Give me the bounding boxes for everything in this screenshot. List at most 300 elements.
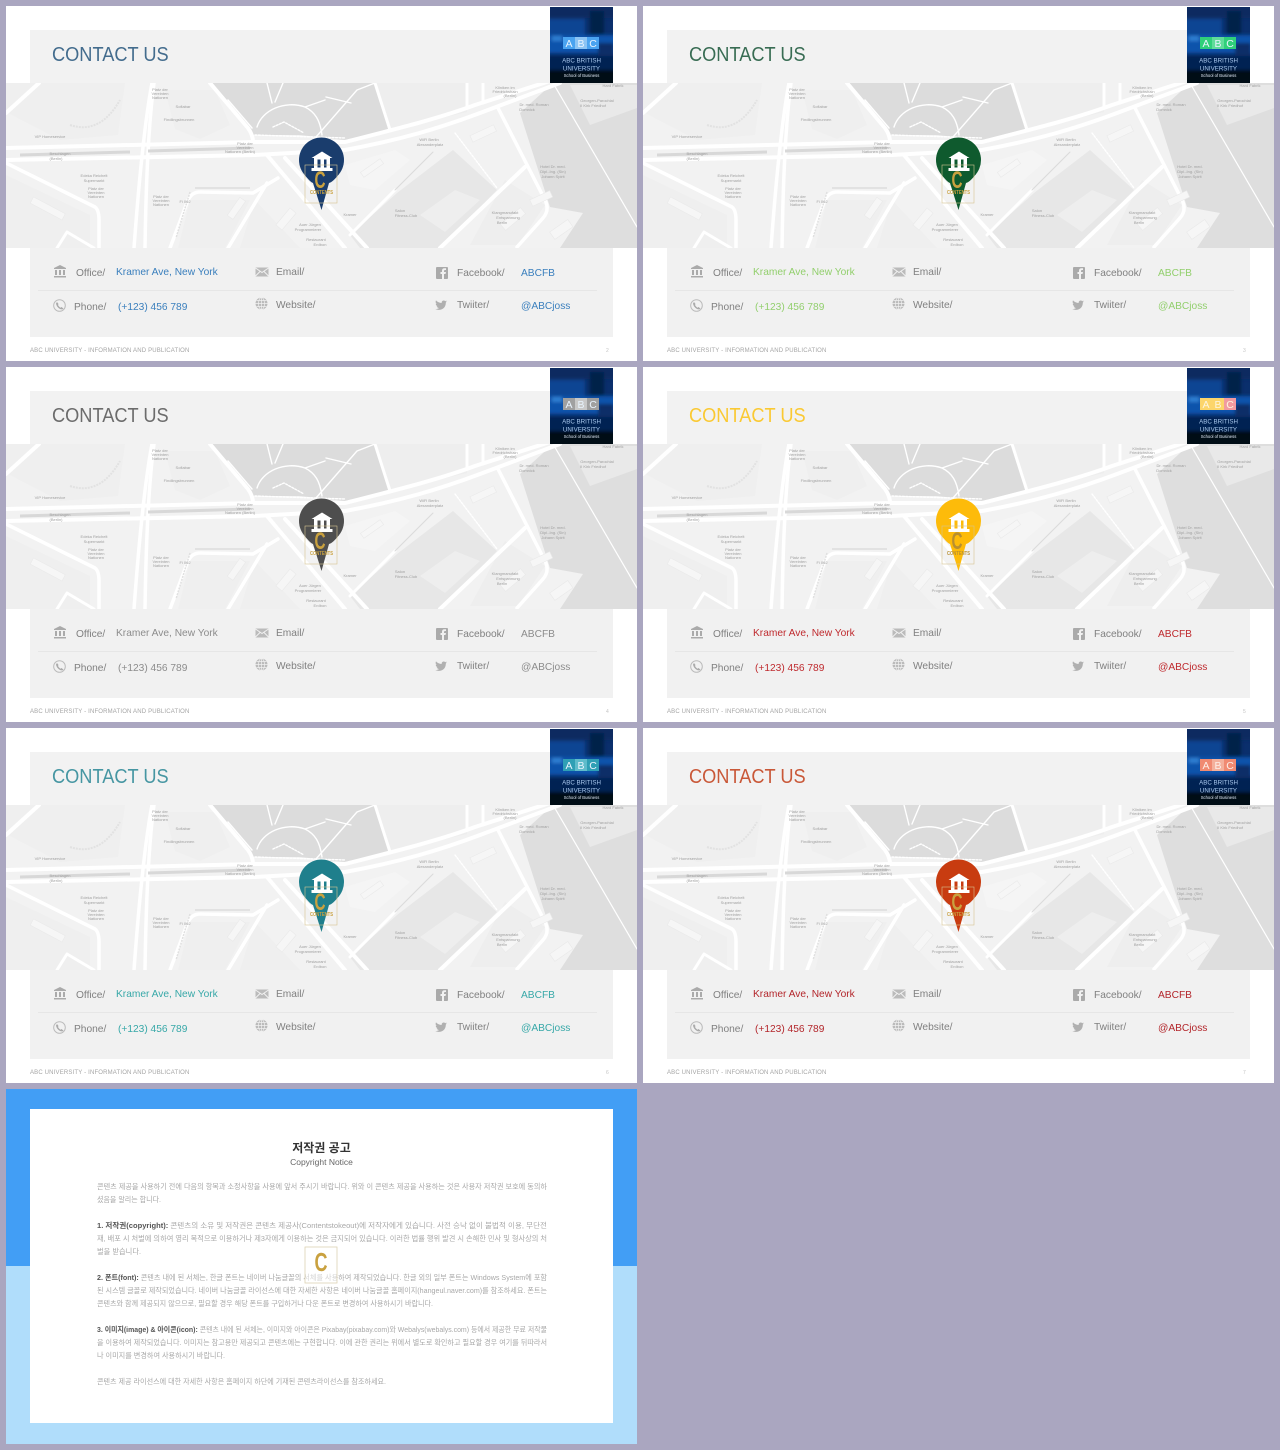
- map: Berlin: [497, 220, 507, 225]
- logo: C: [589, 399, 597, 411]
- icon: twitter: [1072, 1022, 1084, 1032]
- map: Nationen: [789, 95, 805, 100]
- map: (Berlin): [50, 156, 63, 161]
- email label: Email/: [276, 267, 304, 278]
- title: CONTACT US: [52, 405, 168, 427]
- facebook value: ABCFB: [1158, 629, 1192, 640]
- logo: A: [565, 760, 573, 772]
- slide 3: gray contact panel: [6, 367, 637, 722]
- location pin: [933, 858, 983, 934]
- map: Auer Jürgen: [299, 583, 321, 588]
- slide 5: teal contact panel: [6, 728, 637, 1083]
- map: Erdbon: [951, 603, 963, 608]
- map: Johann Spirit: [1178, 896, 1203, 901]
- logo: B: [1214, 38, 1222, 50]
- logo: UNIVERSITY: [1200, 788, 1237, 794]
- map: Sofiabar: [176, 826, 191, 831]
- logo: UNIVERSITY: [563, 66, 600, 72]
- logo: School of Business: [564, 73, 599, 78]
- footer: ABC UNIVERSITY - INFORMATION AND PUBLICATION: [667, 1070, 826, 1076]
- logo: A: [1202, 399, 1210, 411]
- map: Dipl.-Ing. (Sin): [540, 530, 566, 535]
- map: Nationen: [88, 555, 104, 560]
- map: Johann Spirit: [541, 174, 566, 179]
- office value: Kramer Ave, New York: [753, 628, 855, 639]
- location pin: [299, 138, 344, 210]
- intro paragraph: 콘텐츠 제공을 사용하기 전에 다음의 항목과 소정사항을 사용에 앞서 주시기 바랍니다. 위와 이 콘텐츠 제공을 사용하는 것은 사용자 저작권 보호에 동의하: [97, 1181, 547, 1191]
- map: Entspannung: [1133, 937, 1157, 942]
- icon: email: [255, 989, 269, 999]
- map: Friedrichshain: [492, 450, 518, 455]
- section: image and icon: 을 이용하여 제작되었습니다. 이미지는 참고용만 제공되고 콘텐츠에는 구현합니다. 이에 관한 권리는 위에서 별도로 확인하고 필요할 경우 여기를 뒤따라서: [97, 1337, 547, 1347]
- map: Dipl.-Ing. (Sin): [540, 169, 566, 174]
- icon: office: [690, 986, 704, 1000]
- map: WiFi Berlin: [419, 137, 439, 142]
- location pin: CONTENTS: [947, 190, 971, 196]
- logo: [1187, 729, 1250, 805]
- map: Johann Spirit: [541, 535, 566, 540]
- map: Platz der: [874, 863, 891, 868]
- map: Platz der: [789, 809, 806, 814]
- map: Beschlagen: [687, 512, 707, 517]
- section: image and icon: [97, 1324, 547, 1360]
- slide 4: yellow contact panel: [643, 367, 1274, 722]
- map: Kliniken im: [1132, 85, 1152, 90]
- map: Vereinten: [789, 452, 805, 457]
- twitter value: @ABCjoss: [521, 662, 570, 673]
- copyright notice slide: [6, 1089, 637, 1444]
- map: Platz der: [88, 186, 105, 191]
- map: Fi 002: [816, 560, 828, 565]
- map: Platz der: [152, 87, 169, 92]
- map: Hotel Dr. med.: [1177, 164, 1203, 169]
- map: Findlingsbrunnen: [164, 117, 194, 122]
- map: Klangmanufakt: [492, 210, 519, 215]
- title: CONTACT US: [688, 44, 805, 66]
- map: Erdbon: [314, 964, 326, 969]
- page number: 2: [606, 348, 609, 354]
- slide 2: green contact panel: [643, 6, 1274, 361]
- map: Restaurant: [943, 237, 964, 242]
- map: Hard Fabrik: [603, 444, 623, 449]
- footer: ABC UNIVERSITY - INFORMATION AND PUBLICATION: [667, 709, 826, 715]
- location pin: [299, 860, 344, 932]
- logo: UNIVERSITY: [1200, 66, 1237, 72]
- twitter value: @ABCjoss: [521, 301, 570, 312]
- map: Hotel Dr. med.: [540, 886, 566, 891]
- logo: B: [577, 760, 585, 772]
- logo: A: [1202, 38, 1210, 50]
- map: Vereinten: [152, 91, 168, 96]
- logo: A: [565, 38, 573, 50]
- location pin: [936, 498, 981, 571]
- icon: office: [691, 265, 703, 278]
- map: Nationen: [152, 95, 168, 100]
- map: Platz der: [790, 194, 807, 199]
- map: Nationen: [790, 563, 806, 568]
- map: Beschlagen: [687, 151, 707, 156]
- map: Vereinten: [152, 452, 168, 457]
- notice heading: 저작권 공고: [292, 1140, 351, 1155]
- map: Friedrichshain: [1129, 89, 1155, 94]
- map: Georgen-Parochial: [1217, 98, 1251, 103]
- map: Platz der: [88, 908, 105, 913]
- logo: C: [1226, 760, 1234, 772]
- map: Hotel Dr. med.: [1177, 525, 1203, 530]
- map: Klangmanufakt: [1129, 571, 1156, 576]
- map: Vereinten: [790, 559, 806, 564]
- icon: email: [892, 989, 906, 999]
- icon: website: [892, 1019, 905, 1032]
- map: Domnick: [1156, 107, 1172, 112]
- map: Nationen (Berlin): [225, 871, 256, 876]
- map: Erdbon: [314, 242, 326, 247]
- section: copyright: [97, 1220, 547, 1256]
- map: Programmierer: [932, 588, 959, 593]
- logo: ABC BRITISH: [562, 58, 601, 64]
- logo: ABC BRITISH: [562, 780, 601, 786]
- map: Auer Jürgen: [299, 944, 321, 949]
- map: WiFi Berlin: [1056, 137, 1076, 142]
- website label: Website/: [913, 661, 952, 672]
- map: Alexanderplatz: [1054, 503, 1080, 508]
- header band: [30, 391, 613, 444]
- website label: Website/: [913, 1022, 952, 1033]
- map: Vereinten: [153, 559, 169, 564]
- map: (Berlin): [1141, 93, 1154, 98]
- email label: Email/: [913, 628, 941, 639]
- map: Platz der: [725, 908, 742, 913]
- website label: Website/: [276, 661, 315, 672]
- phone label: Phone/: [711, 302, 743, 313]
- icon: phone: [690, 299, 703, 312]
- icon: facebook: [436, 989, 448, 1001]
- map: Platz der: [725, 186, 742, 191]
- map: Domnick: [1156, 829, 1172, 834]
- twitter value: @ABCjoss: [1158, 1023, 1207, 1034]
- map: Platz der: [790, 555, 807, 560]
- map: Findlingsbrunnen: [164, 478, 194, 483]
- map: Nationen: [153, 563, 169, 568]
- facebook label: Facebook/: [457, 268, 505, 279]
- map: Dipl.-Ing. (Sin): [1177, 891, 1203, 896]
- map: Kramer: [343, 212, 357, 217]
- map: Platz der: [153, 555, 170, 560]
- map: Dipl.-Ing. (Sin): [1177, 530, 1203, 535]
- icon: office: [691, 626, 703, 638]
- section: font: 콘텐츠와 함께 제공되지 않으므로, 필요할 경우 해당 폰트를 구입하거나 다운 폰트로 변경하여 사용하시기 바랍니다.: [97, 1298, 433, 1308]
- map: Nationen: [153, 202, 169, 207]
- map: Restaurant: [943, 959, 964, 964]
- map: Vereinten: [153, 920, 169, 925]
- map: Platz der: [790, 916, 807, 921]
- map: [643, 83, 1274, 248]
- section: image and icon: 나 이미지를 변경하여 사용하시기 바랍니다.: [97, 1350, 225, 1360]
- section: copyright: 벌을 받습니다.: [97, 1246, 141, 1256]
- map: Platz der: [153, 916, 170, 921]
- map: Dr. med. Roman: [519, 824, 549, 829]
- location pin: C: [314, 528, 326, 555]
- map: (Berlin): [1141, 454, 1154, 459]
- map: Hard Fabrik: [1240, 83, 1260, 88]
- email label: Email/: [913, 267, 941, 278]
- footer: ABC UNIVERSITY - INFORMATION AND PUBLICATION: [30, 1070, 190, 1076]
- icon: phone: [690, 1021, 703, 1034]
- map: VIP Homeservice: [672, 495, 703, 500]
- facebook value: ABCFB: [1158, 268, 1192, 279]
- map: Fi 002: [179, 199, 191, 204]
- map: Auer Jürgen: [936, 944, 958, 949]
- office label: Office/: [713, 990, 742, 1001]
- map: II Kirk Friedhof: [580, 464, 607, 469]
- map: Auer Jürgen: [936, 222, 958, 227]
- map: Johann Spirit: [1178, 174, 1203, 179]
- map: Platz der: [88, 547, 105, 552]
- office label: Office/: [76, 268, 105, 279]
- map: Vereinten: [874, 145, 890, 150]
- header band: [30, 30, 613, 83]
- map: Restaurant: [943, 598, 964, 603]
- map: Klangmanufakt: [1129, 210, 1156, 215]
- header band: [667, 30, 1250, 83]
- map: Fitness-Club: [1032, 213, 1055, 218]
- map: Edeka Reichelt: [81, 895, 108, 900]
- map: Platz der: [874, 502, 891, 507]
- twitter value: @ABCjoss: [1158, 301, 1207, 312]
- map: Fitness-Club: [395, 574, 418, 579]
- map: Edeka Reichelt: [718, 895, 745, 900]
- phone label: Phone/: [74, 1024, 106, 1035]
- slide 1: blue contact panel: [6, 6, 637, 361]
- map: (Berlin): [504, 93, 517, 98]
- map: Johann Spirit: [541, 896, 566, 901]
- phone value: (+123) 456 789: [118, 1024, 187, 1035]
- icon: phone: [53, 1021, 66, 1034]
- icon: facebook: [1073, 628, 1085, 640]
- map: WiFi Berlin: [1056, 859, 1076, 864]
- header band: [667, 391, 1250, 444]
- logo: School of Business: [1201, 73, 1236, 78]
- map: [643, 805, 1274, 970]
- map: Entspannung: [1133, 576, 1157, 581]
- office value: Kramer Ave, New York: [116, 267, 218, 278]
- map: VIP Homeservice: [35, 134, 66, 139]
- facebook value: ABCFB: [521, 268, 555, 279]
- map: Hard Fabrik: [603, 83, 623, 88]
- location pin: C: [314, 167, 326, 194]
- location pin: C: [952, 889, 962, 916]
- twitter value: @ABCjoss: [521, 1023, 570, 1034]
- map: Domnick: [519, 107, 535, 112]
- map: Dr. med. Roman: [519, 463, 549, 468]
- map: Klangmanufakt: [492, 571, 519, 576]
- map: Findlingsbrunnen: [801, 478, 831, 483]
- logo: ABC BRITISH: [1199, 418, 1238, 426]
- map: Salon: [1032, 208, 1042, 213]
- map: VIP Homeservice: [672, 856, 703, 861]
- section: image and icon: 3. 이미지(image) & 아이콘(icon): 콘텐츠 내에 된 서체는, 이미지와 아이콘은 Pixabay(pixabay.com)와 Webalys(webalys.com) 등에서 제공한 무료 저작물: [97, 1324, 547, 1334]
- map: Beschlagen: [687, 873, 707, 878]
- map: VIP Homeservice: [35, 495, 66, 500]
- map: Programmierer: [295, 588, 322, 593]
- map: Beschlagen: [50, 873, 70, 878]
- office value: Kramer Ave, New York: [116, 628, 218, 639]
- map: Georgen-Parochial: [580, 98, 614, 103]
- map: Vereinten: [88, 912, 104, 917]
- footer: ABC UNIVERSITY - INFORMATION AND PUBLICATION: [30, 709, 190, 715]
- map: Dr. med. Roman: [1156, 463, 1186, 468]
- icon: facebook: [1073, 989, 1085, 1001]
- icon: phone: [53, 299, 66, 312]
- section: copyright: 재, 배포 시 처벌에 의하여 영리 목적으로 이용하거나 제3자에게 이용하는 것은 금지되어 있습니다. 이러한 법률 행위 발견 시 손해한 민사 및 형사상의 처: [97, 1233, 547, 1243]
- map: Berlin: [1134, 942, 1144, 947]
- title: CONTACT US: [52, 44, 168, 66]
- map: Salon: [395, 569, 405, 574]
- map: Salon: [1032, 569, 1042, 574]
- map: Hard Fabrik: [1240, 444, 1260, 449]
- phone value: (+123) 456 789: [755, 663, 824, 674]
- map: Platz der: [237, 141, 254, 146]
- page number: 7: [1243, 1070, 1246, 1076]
- office label: Office/: [76, 990, 105, 1001]
- icon: twitter: [436, 662, 447, 671]
- intro paragraph: [97, 1181, 547, 1204]
- office value: Kramer Ave, New York: [753, 267, 855, 278]
- logo: B: [577, 38, 585, 50]
- page number: 4: [606, 709, 609, 715]
- map: Nationen: [789, 817, 805, 822]
- map: Programmierer: [295, 227, 322, 232]
- icon: website: [255, 1019, 268, 1032]
- map: WiFi Berlin: [1056, 498, 1076, 503]
- location pin: CONTENTS: [310, 912, 334, 918]
- logo: School of Business: [564, 795, 599, 800]
- map: Nationen: [790, 202, 806, 207]
- icon: facebook: [1073, 267, 1085, 279]
- map: Dipl.-Ing. (Sin): [1177, 169, 1203, 174]
- icon: office: [54, 265, 66, 278]
- logo: C: [589, 38, 597, 50]
- map: Salon: [395, 208, 405, 213]
- map: Dr. med. Roman: [519, 102, 549, 107]
- logo: UNIVERSITY: [563, 788, 600, 794]
- twitter label: Twiiter/: [1094, 661, 1126, 672]
- map: Platz der: [725, 547, 742, 552]
- map: Nationen: [88, 194, 104, 199]
- map: Kliniken im: [495, 446, 515, 451]
- map: Alexanderplatz: [417, 503, 443, 508]
- map: Auer Jürgen: [299, 222, 321, 227]
- map: Kramer: [980, 573, 994, 578]
- map: Hard Fabrik: [1240, 805, 1260, 810]
- map: Nationen: [152, 456, 168, 461]
- location pin: CONTENTS: [947, 912, 971, 918]
- phone label: Phone/: [711, 1024, 743, 1035]
- map: Fi 002: [179, 560, 191, 565]
- logo: B: [1214, 760, 1222, 772]
- map: Edeka Reichelt: [81, 173, 108, 178]
- map: Nationen: [790, 924, 806, 929]
- map: Sofiabar: [813, 465, 828, 470]
- icon: email: [256, 628, 268, 638]
- website label: Website/: [913, 300, 952, 311]
- map: Findlingsbrunnen: [164, 839, 194, 844]
- logo: A: [565, 399, 573, 411]
- facebook label: Facebook/: [457, 629, 505, 640]
- map: Beschlagen: [50, 151, 70, 156]
- map: Friedrichshain: [1129, 811, 1155, 816]
- map: Alexanderplatz: [1054, 142, 1080, 147]
- map: Erdbon: [951, 242, 963, 247]
- map: Domnick: [519, 468, 535, 473]
- map: Berlin: [1134, 581, 1144, 586]
- map: Klangmanufakt: [1129, 932, 1156, 937]
- map: Nationen: [88, 916, 104, 921]
- map: Klangmanufakt: [492, 932, 519, 937]
- map: Dr. med. Roman: [1156, 824, 1186, 829]
- map: VIP Homeservice: [35, 856, 66, 861]
- map: Friedrichshain: [1129, 450, 1155, 455]
- map: Domnick: [1156, 468, 1172, 473]
- map: Platz der: [789, 448, 806, 453]
- map: Nationen (Berlin): [862, 871, 893, 876]
- twitter label: Twiiter/: [457, 661, 489, 672]
- logo: School of Business: [1201, 795, 1236, 800]
- logo: [550, 729, 613, 805]
- location pin: CONTENTS: [947, 551, 971, 557]
- map: Dipl.-Ing. (Sin): [540, 891, 566, 896]
- map: Supermarkt: [84, 539, 105, 544]
- logo: [550, 368, 613, 444]
- map: Supermarkt: [721, 539, 742, 544]
- map: Hotel Dr. med.: [540, 525, 566, 530]
- map: Nationen (Berlin): [225, 149, 256, 154]
- map: Platz der: [153, 194, 170, 199]
- map: Georgen-Parochial: [1217, 820, 1251, 825]
- header band: [30, 752, 613, 805]
- logo: [550, 7, 613, 83]
- map: Georgen-Parochial: [1217, 459, 1251, 464]
- office value: Kramer Ave, New York: [116, 989, 218, 1000]
- icon: twitter: [1072, 662, 1084, 671]
- map: Platz der: [237, 502, 254, 507]
- map: Kliniken im: [1132, 446, 1152, 451]
- map: [643, 444, 1274, 609]
- facebook value: ABCFB: [521, 990, 555, 1001]
- map: Berlin: [497, 581, 507, 586]
- notice subheading: Copyright Notice: [290, 1157, 353, 1167]
- icon: website: [256, 298, 268, 310]
- map: Georgen-Parochial: [580, 459, 614, 464]
- watermark: C: [314, 1247, 328, 1277]
- logo: ABC BRITISH: [1199, 780, 1238, 786]
- website label: Website/: [276, 300, 315, 311]
- map: Beschlagen: [50, 512, 70, 517]
- map: Supermarkt: [84, 178, 105, 183]
- logo: [1187, 368, 1250, 444]
- map: Vereinten: [790, 920, 806, 925]
- map: Vereinten: [237, 506, 253, 511]
- footer: ABC UNIVERSITY - INFORMATION AND PUBLICATION: [30, 348, 190, 354]
- twitter label: Twiiter/: [457, 1022, 489, 1033]
- facebook label: Facebook/: [457, 990, 505, 1001]
- map: Vereinten: [725, 551, 741, 556]
- contact info panel: [30, 248, 613, 337]
- map: Restaurant: [306, 959, 327, 964]
- twitter label: Twiiter/: [1094, 1022, 1126, 1033]
- map: Berlin: [497, 942, 507, 947]
- office label: Office/: [713, 268, 742, 279]
